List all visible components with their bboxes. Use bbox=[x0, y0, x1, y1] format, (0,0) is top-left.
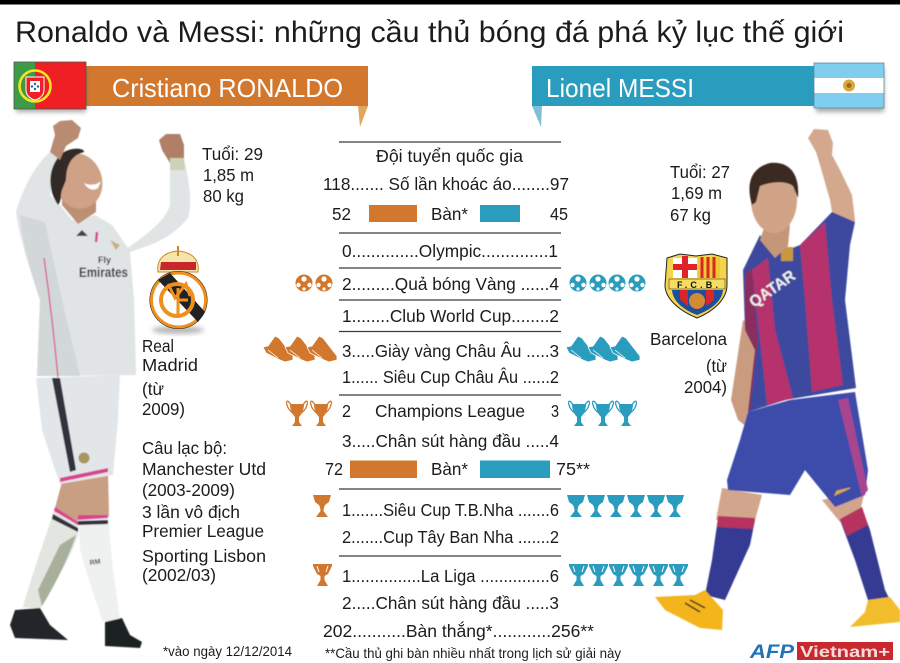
footnote: date: *vào ngày 12/12/2014 bbox=[163, 644, 292, 659]
text: Ronaldo club history: (2002/03) bbox=[142, 565, 216, 585]
comparison table: 118....... Số lần khoác áo........97 bbox=[323, 174, 569, 194]
stats: Messi: 1,69 m bbox=[671, 183, 722, 203]
legs bbox=[716, 488, 762, 520]
title: Ronaldo và Messi: những cầu thủ bóng đá phá kỷ lục thế giới bbox=[15, 16, 844, 49]
comparison table: 2 bbox=[342, 401, 351, 421]
comparison table: 3.....Giày vàng Châu Âu .....3 bbox=[342, 341, 559, 361]
arms bbox=[808, 129, 855, 255]
stats: Messi: 67 kg bbox=[670, 205, 711, 225]
icons: Ronaldo golden balls bbox=[296, 274, 332, 292]
crest: Barcelona: F.C.B. bbox=[677, 280, 718, 290]
stats: Messi: Tuổi: 27 bbox=[670, 162, 730, 182]
logo: AFP Vietnam+ bbox=[749, 642, 893, 663]
icons: Messi golden boots bbox=[566, 336, 640, 362]
stats: Messi bbox=[670, 162, 730, 225]
icon: Ronaldo La Liga bbox=[313, 564, 332, 586]
icons: Messi golden balls bbox=[570, 274, 646, 292]
stats: Ronaldo: 1,85 m bbox=[203, 165, 254, 185]
comparison table: 1...... Siêu Cup Châu Âu ......2 bbox=[342, 367, 559, 387]
head bbox=[760, 225, 790, 258]
comparison table: 0..............Olympic..............1 bbox=[342, 241, 558, 261]
comparison table: 202...........Bàn thắng*............256** bbox=[323, 620, 594, 641]
stats: Ronaldo: Tuổi: 29 bbox=[202, 144, 263, 164]
icons: Ronaldo golden boots bbox=[263, 336, 337, 362]
left sock and right sock bbox=[23, 507, 78, 610]
neck and head bbox=[62, 190, 96, 224]
comparison table: 2.....Chân sút hàng đầu .....3 bbox=[342, 593, 559, 613]
player photo: Messi bbox=[655, 129, 900, 630]
banner: Cristiano Ronaldo bbox=[86, 66, 368, 127]
comparison table: 45 bbox=[550, 204, 568, 224]
player photo: Messi: QATAR bbox=[747, 267, 799, 311]
icons: Messi Champions League trophies bbox=[569, 401, 636, 426]
logo: AFP Vietnam+: Vietnam+ bbox=[800, 644, 890, 661]
shoes bbox=[10, 608, 68, 640]
shorts bbox=[727, 392, 868, 507]
player photo: Ronaldo: RM bbox=[89, 559, 101, 567]
shirt and arms bbox=[16, 152, 190, 376]
text: Real Madrid since 2009: Real bbox=[142, 336, 174, 356]
text: Ronaldo club history: Manchester Utd bbox=[142, 459, 266, 479]
crest: Real Madrid bbox=[150, 246, 207, 334]
fists bbox=[50, 120, 81, 160]
flag: Argentina bbox=[814, 63, 884, 112]
top black bar bbox=[0, 0, 900, 4]
comparison table: Champions League bbox=[375, 401, 525, 421]
comparison table: Bàn* bbox=[431, 459, 468, 479]
player photo: Ronaldo bbox=[10, 120, 190, 648]
icons: Messi La Liga bbox=[569, 564, 688, 586]
text: Real Madrid since 2009 bbox=[142, 336, 198, 419]
comparison table: Bàn* bbox=[431, 204, 468, 224]
stats: Ronaldo bbox=[202, 144, 263, 206]
text: Ronaldo club history: Premier League bbox=[142, 521, 264, 541]
shoes bbox=[655, 590, 723, 630]
player photo: Ronaldo: Emirates bbox=[79, 264, 128, 280]
comparison table bbox=[323, 142, 594, 641]
shorts bbox=[36, 375, 120, 484]
player photo: Ronaldo: Fly bbox=[98, 255, 111, 265]
comparison table: 75** bbox=[556, 459, 590, 479]
text: Barcelona since 2004 bbox=[650, 329, 727, 397]
text: Ronaldo club history bbox=[142, 438, 266, 585]
banner: Lionel Messi: Lionel MESSI bbox=[546, 73, 694, 103]
banner: Lionel Messi bbox=[532, 66, 815, 127]
icons: Ronaldo Champions League trophies bbox=[287, 401, 331, 426]
stats: Ronaldo: 80 kg bbox=[203, 186, 244, 206]
text: Barcelona since 2004: 2004) bbox=[684, 377, 727, 397]
banner: Cristiano Ronaldo: Cristiano RONALDO bbox=[112, 73, 343, 103]
logo: AFP Vietnam+: AFP bbox=[749, 642, 794, 663]
flag: Portugal bbox=[14, 62, 86, 112]
comparison table: Đội tuyển quốc gia bbox=[376, 146, 523, 166]
crest: Barcelona bbox=[665, 254, 727, 318]
text: Ronaldo club history: Sporting Lisbon bbox=[142, 546, 266, 566]
comparison table: 1.......Siêu Cup T.B.Nha .......6 bbox=[342, 500, 559, 520]
comparison table: 2.......Cup Tây Ban Nha .......2 bbox=[342, 527, 559, 547]
text: Real Madrid since 2009: 2009) bbox=[142, 399, 185, 419]
text: Real Madrid since 2009: (từ bbox=[142, 379, 164, 399]
comparison table: 72 bbox=[325, 459, 343, 479]
text: Ronaldo club history: (2003-2009) bbox=[142, 480, 235, 500]
icons: Messi Spanish Super Cups bbox=[567, 495, 684, 517]
comparison table: 3.....Chân sút hàng đầu .....4 bbox=[342, 431, 559, 451]
bars: Champions League goals bbox=[350, 460, 550, 478]
comparison table: 52 bbox=[332, 204, 351, 224]
bars: national team goals bbox=[369, 205, 520, 222]
text: Ronaldo club history: 3 lần vô địch bbox=[142, 502, 240, 522]
shirt bbox=[743, 212, 856, 412]
icon: Ronaldo Spanish Super Cup bbox=[313, 495, 331, 517]
comparison table: 1........Club World Cup........2 bbox=[342, 306, 559, 326]
text: Barcelona since 2004: Barcelona bbox=[650, 329, 727, 349]
text: Ronaldo club history: Câu lạc bộ: bbox=[142, 438, 227, 458]
footnote: top scorer: **Cầu thủ ghi bàn nhiều nhất trong lịch sử giải này bbox=[325, 645, 621, 661]
comparison table: 1...............La Liga ...............6 bbox=[342, 566, 559, 586]
text: Barcelona since 2004: (từ bbox=[706, 356, 727, 376]
comparison table: 3 bbox=[551, 401, 559, 421]
text: Real Madrid since 2009: Madrid bbox=[142, 355, 198, 375]
comparison table: 2.........Quả bóng Vàng ......4 bbox=[342, 274, 559, 294]
